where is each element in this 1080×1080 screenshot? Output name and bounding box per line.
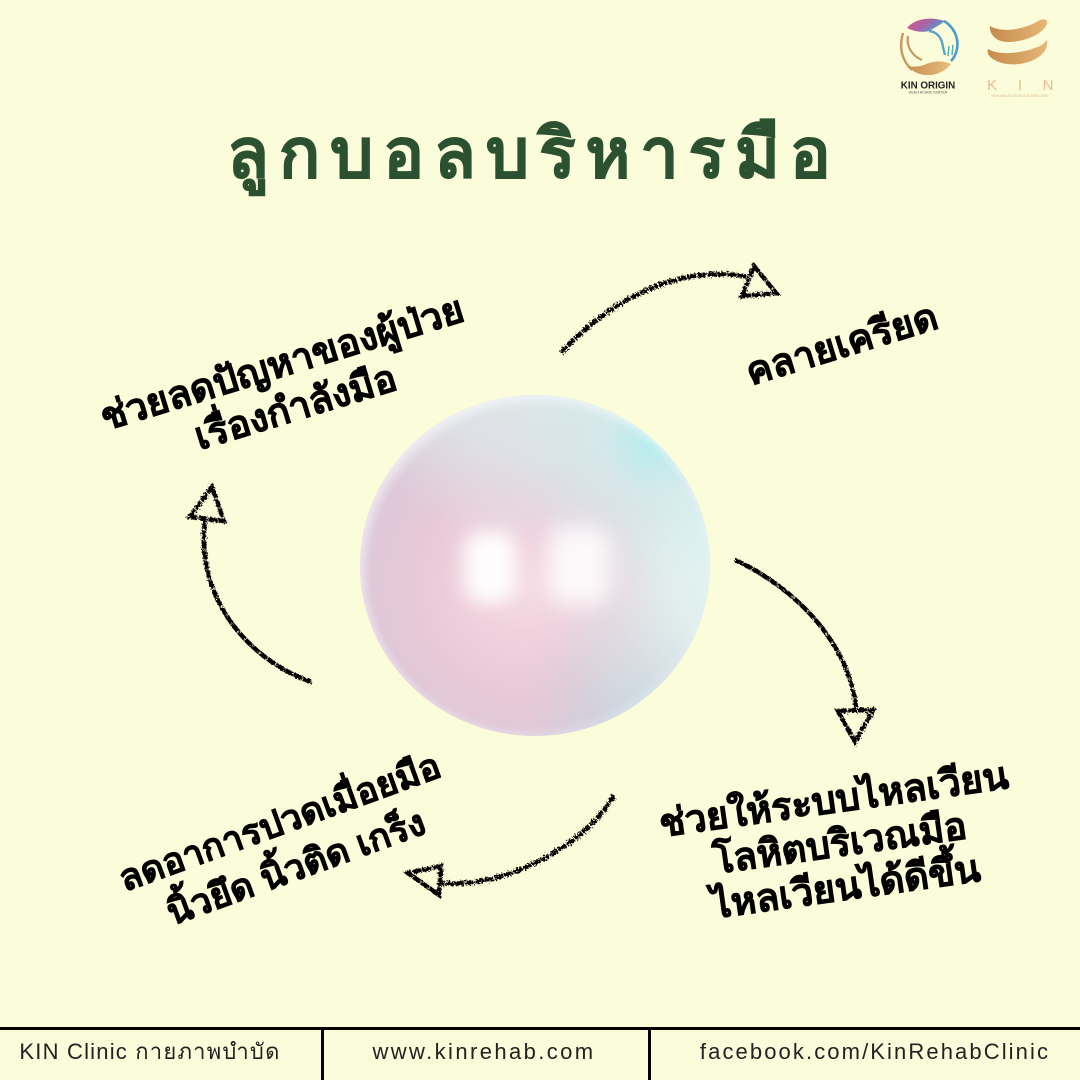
logo: KIN Rehabilitation: K: [987, 77, 997, 94]
footer divider right: [648, 1030, 651, 1080]
logo: KIN Origin: HEALTHCARE CENTER: [909, 90, 948, 94]
caption: pain relief: นิ้วยึด นิ้วติด เกร็ง: [161, 801, 431, 933]
ball tint: [360, 395, 710, 736]
caption: stress: คลายเครียด: [741, 296, 943, 394]
footer: clinic name: KIN Clinic กายภาพบำบัด: [19, 1039, 281, 1064]
ball highlights: [464, 531, 516, 603]
caption: circulation: โลหิตบริเวณมือ: [711, 805, 969, 883]
logo: KIN Rehabilitation: [987, 19, 1053, 98]
caption: strength: เรื่องกำลังมือ: [190, 357, 402, 459]
caption: circulation: ช่วยให้ระบบไหลเวียน: [657, 755, 1011, 846]
caption: pain relief: ลดอาการปวดเมื่อยมือ: [113, 745, 446, 899]
logo: KIN Rehabilitation: I: [1018, 77, 1022, 94]
footer divider left: [321, 1030, 324, 1080]
logo: KIN Origin: KIN ORIGIN: [901, 80, 955, 92]
arrow: left: [190, 487, 311, 682]
logo: KIN Origin: [900, 18, 959, 94]
caption: circulation: ไหลเวียนได้ดีขึ้น: [709, 848, 983, 927]
logo: KIN Rehabilitation: REHABILITATION & HOMECARE: [991, 94, 1049, 98]
arrow: bottom: [408, 795, 614, 895]
footer: [0, 1027, 1080, 1080]
footer: facebook: facebook.com/KinRehabClinic: [700, 1039, 1050, 1064]
ball rim: [360, 395, 710, 736]
arrow: top right: [561, 266, 776, 353]
caption: circulation: [657, 755, 1011, 927]
title: ลูกบอลบริหารมือ: [227, 116, 841, 192]
arrow: right: [735, 560, 873, 742]
footer: website: www.kinrehab.com: [372, 1039, 596, 1064]
ball: [360, 395, 710, 736]
logo: KIN Rehabilitation: N: [1043, 77, 1053, 94]
caption: strength: ช่วยลดปัญหาของผู้ป่วย: [96, 289, 469, 439]
